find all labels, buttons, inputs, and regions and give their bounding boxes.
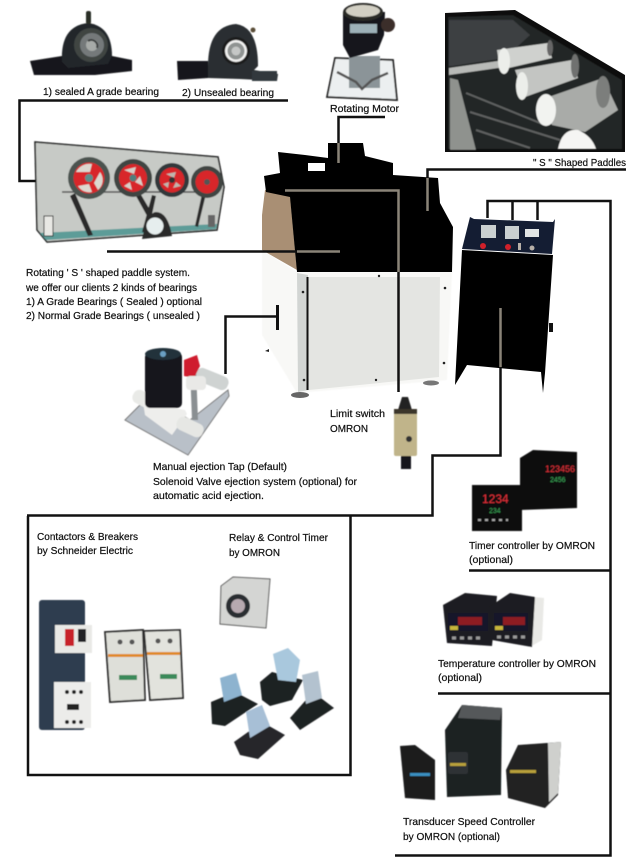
label: limit switch: OMRON <box>330 424 368 435</box>
label: limit switch <box>330 409 385 435</box>
wheel 3 <box>155 163 189 197</box>
paragraph: ejection tap: Manual ejection Tap (Default) <box>153 462 287 473</box>
cabinet meter middle <box>505 226 519 239</box>
photo: transducer speed controllers <box>400 705 561 808</box>
leader line: rotating motor <box>338 117 385 163</box>
paragraph: ejection tap <box>153 462 358 502</box>
label: rotating motor: Rotating Motor <box>330 104 400 115</box>
leader line: meters to optional controllers <box>395 201 610 856</box>
photo: timer controllers: 234 <box>489 508 501 515</box>
cabinet meter right <box>525 229 539 237</box>
paragraph: paddle system description <box>25 268 202 322</box>
label: transducer speed controller <box>403 817 536 843</box>
paragraph: paddle system description: we offer our clients 2 kinds of bearings <box>25 283 197 294</box>
wheel 4 <box>191 166 223 198</box>
label: transducer speed controller: by OMRON (optional) <box>403 832 500 843</box>
photo: control timer <box>220 577 270 628</box>
heading: contactors <box>37 532 138 557</box>
photo: timer controllers: 123456 <box>545 464 575 474</box>
heading: relay and timer: Relay & Control Timer <box>229 533 329 544</box>
leader line: bearings to paddle system <box>20 100 288 181</box>
machine hood slot <box>308 163 325 171</box>
cabinet control panel <box>462 217 555 254</box>
label: transducer speed controller: Transducer Speed Controller <box>403 817 536 828</box>
label: sealed bearing: 1) sealed A grade bearing <box>43 87 159 98</box>
paragraph: ejection tap: automatic acid ejection. <box>153 491 264 502</box>
heading: relay and timer: by OMRON <box>229 548 280 559</box>
photo: contactor <box>39 600 92 730</box>
label: timer controller <box>469 541 595 566</box>
photo: timer controllers <box>472 450 577 531</box>
leader line: ejection tap <box>226 277 308 390</box>
main machine <box>262 143 453 398</box>
paragraph: paddle system description: Rotating ' S ' shaped paddle system. <box>26 268 190 279</box>
label: temperature controller: (optional) <box>438 673 482 684</box>
cabinet latch <box>549 323 553 332</box>
photo: sealed A grade bearing <box>30 11 132 75</box>
photo: timer controllers: 1234 <box>482 492 509 506</box>
wheel 1 <box>68 157 110 199</box>
machine foot right <box>423 380 439 386</box>
cabinet red buttons <box>480 243 534 250</box>
wheel 2 <box>114 159 152 197</box>
label: unsealed bearing: 2) Unsealed bearing <box>182 88 274 99</box>
machine black hood <box>264 143 453 272</box>
leader line: cabinet to electrical panel <box>27 308 500 516</box>
paragraph: ejection tap: Solenoid Valve ejection system (optional) for <box>153 477 358 488</box>
panel border: electrical panel <box>28 516 350 775</box>
photo: unsealed bearing <box>177 24 278 81</box>
heading: relay and timer <box>229 533 329 559</box>
heading: contactors: Contactors & Breakers <box>37 532 138 543</box>
panel: contactors, breakers and relays <box>37 532 334 759</box>
label: temperature controller: Temperature controller by OMRON <box>438 659 596 670</box>
control cabinet <box>455 217 555 393</box>
label: S shaped paddles: " S " Shaped Paddles <box>533 158 626 169</box>
machine tan side housing <box>262 190 297 270</box>
photo: S shaped paddles <box>445 10 625 152</box>
photo: temperature controllers <box>443 593 544 647</box>
machine panel rivets <box>265 275 446 381</box>
photo: relays <box>211 648 334 759</box>
cabinet meter left <box>481 225 496 238</box>
leader line: S shaped paddles <box>428 170 626 211</box>
photo: circuit breakers <box>105 630 183 702</box>
photo: timer controllers: 2456 <box>550 477 566 484</box>
machine foot left <box>291 392 309 398</box>
photo: rotating motor <box>327 3 397 100</box>
label: timer controller: (optional) <box>469 555 513 566</box>
paragraph: paddle system description: 2) Normal Grade Bearings ( unsealed ) <box>26 311 200 322</box>
photo: solenoid ejection valve <box>125 348 230 455</box>
label: limit switch: Limit switch <box>330 409 385 420</box>
photo: limit switch <box>394 397 417 469</box>
machine white base <box>262 250 452 393</box>
heading: contactors: by Schneider Electric <box>37 546 133 557</box>
photo: red paddle wheels assembly <box>35 142 224 242</box>
machine side strip <box>297 273 309 392</box>
label: timer controller: Timer controller by OMRON <box>469 541 595 552</box>
leader line: paddle system <box>107 250 340 253</box>
paragraph: paddle system description: 1) A Grade Bearings ( Sealed ) optional <box>26 297 202 308</box>
leader line: limit switch <box>285 190 398 392</box>
machine grey front panel <box>308 277 440 390</box>
label: temperature controller <box>438 659 596 684</box>
cabinet black body <box>455 250 553 393</box>
